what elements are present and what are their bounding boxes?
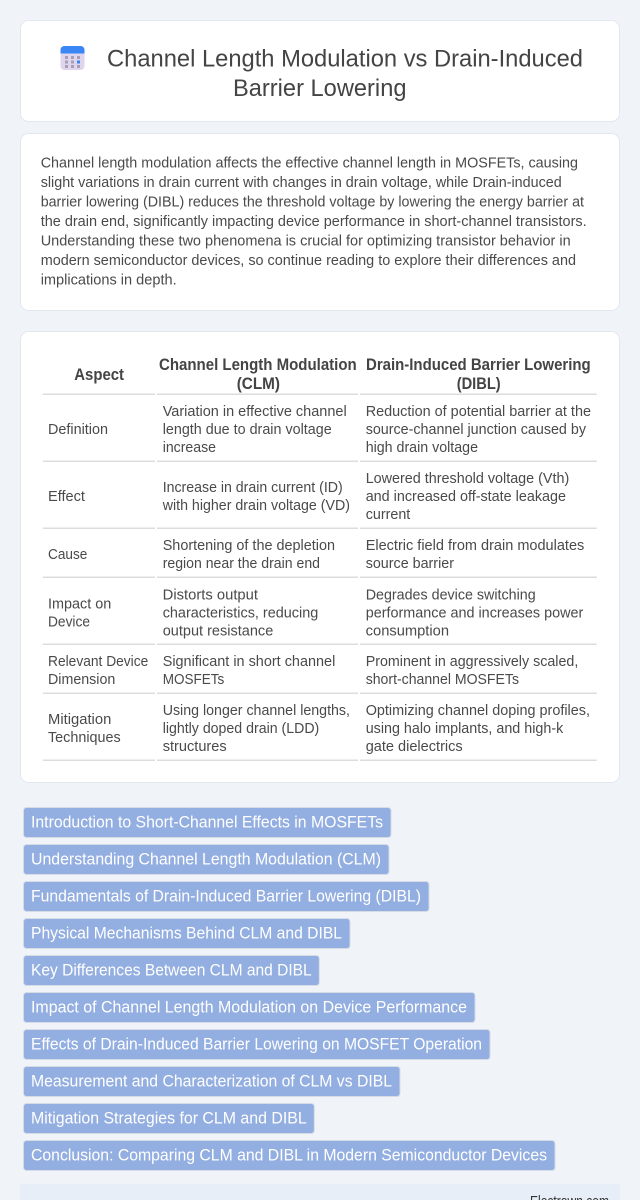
row: cause — [43, 538, 597, 578]
intro paragraph — [41, 156, 587, 288]
row: relevant device dimension: MOSFETs — [163, 672, 224, 688]
row: impact on device — [43, 587, 597, 645]
link: mitigation strategies: Mitigation Strategies for CLM and DIBL — [31, 1110, 307, 1128]
row: relevant device dimension: short-channel MOSFETs — [366, 672, 519, 688]
row: impact on device: characteristics, reducing — [163, 605, 318, 621]
intro paragraph: barrier lowering (DIBL) reduces the threshold voltage by lowering the energy barrier at — [41, 195, 584, 211]
row: definition: Variation in effective channel — [163, 404, 347, 420]
row: effect: and increased off-state leakage — [366, 489, 566, 505]
row: definition: high drain voltage — [366, 440, 478, 456]
row: relevant device dimension: Prominent in aggressively scaled, — [366, 654, 578, 670]
link: conclusion — [24, 1140, 555, 1170]
row: impact on device: performance and increases power — [366, 605, 583, 621]
row: effect: Increase in drain current (ID) — [163, 480, 343, 496]
row: relevant device dimension — [43, 654, 597, 694]
row: cause: source barrier — [366, 556, 454, 572]
link: effects of DIBL: Effects of Drain-Induced Barrier Lowering on MOSFET Operation — [31, 1036, 482, 1054]
row: mitigation techniques: lightly doped drain (LDD) — [163, 721, 319, 737]
link: impact of CLM: Impact of Channel Length Modulation on Device Performance — [31, 999, 467, 1017]
panel: title header — [20, 20, 620, 122]
table header row: Aspect — [74, 366, 125, 384]
intro paragraph: the drain end, significantly impacting device performance in short-channel transistors. — [41, 214, 587, 230]
link: measurement: Measurement and Characterization of CLM vs DIBL — [31, 1073, 392, 1091]
link: mitigation strategies — [24, 1104, 314, 1134]
row: effect: Effect — [48, 489, 85, 505]
link: fundamentals of DIBL — [24, 882, 429, 912]
link: effects of DIBL — [24, 1030, 490, 1060]
icon: calendar — [60, 46, 84, 70]
panel: comparison table — [20, 332, 620, 782]
table header row — [43, 356, 597, 395]
row: mitigation techniques: Using longer channel lengths, — [163, 703, 350, 719]
row: effect — [43, 471, 597, 529]
row: cause: Cause — [48, 547, 87, 563]
row: definition — [43, 404, 597, 462]
link: key differences — [24, 956, 319, 986]
row: impact on device: Degrades device switching — [366, 587, 536, 603]
link: understanding CLM — [24, 844, 389, 874]
row: relevant device dimension: Relevant Device — [48, 654, 148, 670]
intro paragraph: implications in depth. — [41, 272, 177, 288]
row: cause: Shortening of the depletion — [163, 538, 335, 554]
table header row: (CLM) — [237, 375, 280, 393]
intro paragraph: slight variations in drain current with changes in drain voltage, while Drain-induced — [41, 175, 562, 191]
row: effect: Lowered threshold voltage (Vth) — [366, 471, 569, 487]
title: Channel Length Modulation vs Drain-Induced — [107, 46, 583, 73]
row: definition: length due to drain voltage — [163, 422, 332, 438]
row: effect: current — [366, 507, 410, 523]
row: impact on device: consumption — [366, 623, 449, 639]
row: mitigation techniques — [43, 703, 597, 761]
row: definition: Reduction of potential barrier at the — [366, 404, 591, 420]
intro paragraph: Channel length modulation affects the effective channel length in MOSFETs, causing — [41, 156, 578, 172]
row: definition: source-channel junction caused by — [366, 422, 587, 438]
panel: topic links — [24, 808, 555, 1170]
row: impact on device: output resistance — [163, 623, 273, 639]
row: cause: Electric field from drain modulates — [366, 538, 584, 554]
row: mitigation techniques: structures — [163, 739, 227, 755]
link: physical mechanisms — [24, 918, 350, 948]
row: mitigation techniques: Optimizing channel doping profiles, — [366, 703, 590, 719]
link: introduction — [24, 808, 391, 838]
row: impact on device: Distorts output — [163, 587, 258, 603]
table header row: Drain-Induced Barrier Lowering — [366, 356, 591, 374]
link: understanding CLM: Understanding Channel Length Modulation (CLM) — [31, 851, 381, 869]
row: effect: with higher drain voltage (VD) — [162, 498, 350, 514]
row: impact on device: Device — [48, 614, 90, 630]
link: measurement — [24, 1066, 400, 1096]
link: introduction: Introduction to Short-Channel Effects in MOSFETs — [31, 814, 383, 832]
title: Barrier Lowering — [233, 75, 406, 102]
link: key differences: Key Differences Between CLM and DIBL — [31, 962, 312, 980]
row: mitigation techniques: Mitigation — [48, 712, 111, 728]
intro paragraph: Understanding these two phenomena is crucial for optimizing transistor behavior in — [41, 234, 571, 250]
row: mitigation techniques: gate dielectrics — [366, 739, 463, 755]
title — [107, 46, 583, 102]
row: mitigation techniques: Techniques — [48, 730, 121, 746]
link: impact of CLM — [24, 992, 475, 1022]
row: relevant device dimension: Dimension — [48, 672, 115, 688]
row: mitigation techniques: using halo implants, and high-k — [366, 721, 564, 737]
intro paragraph: modern semiconductor devices, so continue reading to explore their differences and — [41, 253, 576, 269]
row: definition: increase — [163, 440, 216, 456]
row: relevant device dimension: Significant in short channel — [163, 654, 335, 670]
link: fundamentals of DIBL: Fundamentals of Drain-Induced Barrier Lowering (DIBL) — [31, 888, 421, 906]
footer — [20, 1184, 620, 1200]
link: conclusion: Conclusion: Comparing CLM and DIBL in Modern Semiconductor Devices — [31, 1147, 547, 1165]
row: impact on device: Impact on — [48, 596, 111, 612]
row: cause: region near the drain end — [163, 556, 320, 572]
row: definition: Definition — [48, 422, 108, 438]
link: physical mechanisms: Physical Mechanisms Behind CLM and DIBL — [31, 925, 342, 943]
panel: introduction text — [20, 134, 620, 310]
table header row: (DIBL) — [457, 375, 501, 393]
table header row: Channel Length Modulation — [159, 356, 357, 374]
